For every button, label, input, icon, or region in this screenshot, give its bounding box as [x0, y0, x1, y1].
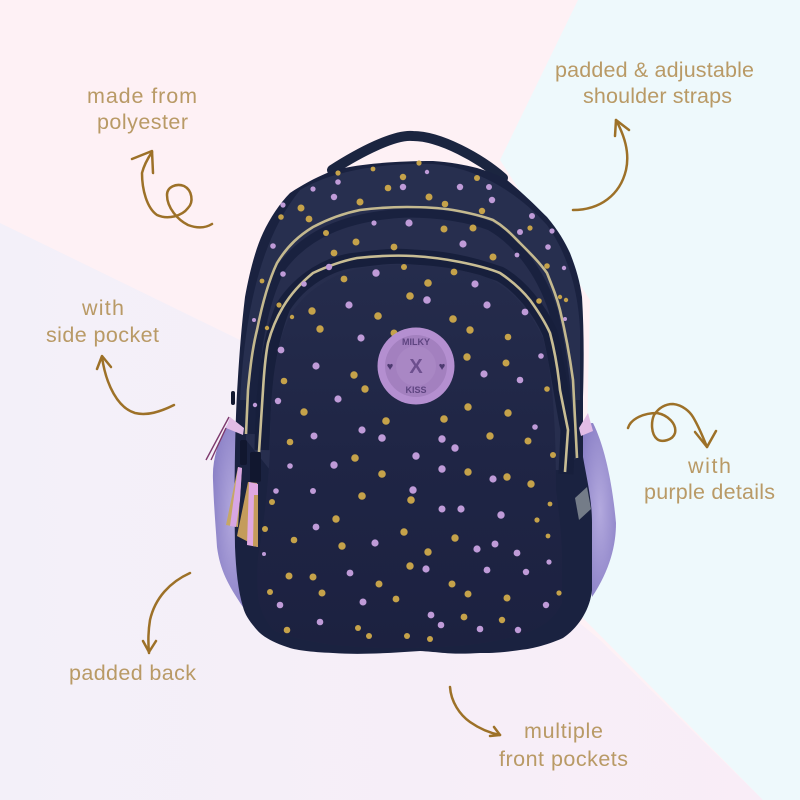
gold dots: [260, 160, 568, 642]
bag body: [235, 161, 592, 654]
round badge: ♥: [439, 361, 445, 373]
callout: made from polyester: [87, 84, 212, 228]
callout: with side pocket: side pocket: [46, 323, 159, 347]
inner zipper band shadow: [262, 256, 568, 474]
callout: with purple details: [628, 404, 775, 504]
backpack: [206, 136, 616, 654]
right mesh side pocket: [580, 423, 616, 597]
callout: made from polyester: polyester: [97, 110, 188, 134]
red cords: [206, 417, 229, 460]
outer zipper: [246, 207, 577, 458]
outer zipper band shadow: [252, 213, 571, 458]
arrow: front pockets: [450, 687, 500, 736]
arrow: purple details loop: [628, 404, 716, 447]
callout: padded and adjustable shoulder straps: shoulder straps: [583, 84, 732, 108]
round badge: X: [409, 356, 423, 378]
zipper pulls: [231, 391, 261, 482]
callout: multiple front pockets: front pockets: [499, 747, 628, 771]
reflective tag: [575, 487, 591, 520]
tassel right: [237, 482, 258, 547]
top section fabric: [240, 164, 580, 400]
right pocket band: [579, 413, 593, 436]
callout: multiple front pockets: [450, 687, 628, 771]
callout: padded back: padded back: [69, 661, 196, 685]
tassel left: [226, 467, 242, 527]
callout: padded and adjustable shoulder straps: [555, 58, 754, 210]
round badge: ♥: [387, 361, 393, 373]
left pocket band: [226, 417, 244, 435]
left mesh side pocket: [213, 420, 250, 607]
arrow: side pocket: [97, 356, 174, 414]
callout: padded and adjustable shoulder straps: padded & adjustable: [555, 58, 754, 82]
front pocket: [257, 265, 562, 648]
top handle: [332, 136, 503, 178]
round badge: MILKY: [402, 337, 430, 347]
arrow: shoulder straps: [573, 120, 629, 210]
arrow: polyester loop: [132, 151, 212, 228]
callout: with side pocket: with: [81, 296, 124, 320]
inner zipper: [259, 256, 568, 472]
arrow: padded back: [143, 573, 190, 653]
middle pocket: [246, 206, 577, 470]
callout: with purple details: purple details: [644, 480, 775, 504]
callout: padded back: [69, 573, 196, 685]
callout: with purple details: with: [687, 454, 731, 478]
callout: made from polyester: made from: [87, 84, 197, 108]
callout: multiple front pockets: multiple: [524, 719, 603, 743]
callout: with side pocket: [46, 296, 174, 414]
round badge: KISS: [405, 385, 427, 395]
purple dots: [252, 170, 567, 633]
round badge: [378, 328, 454, 404]
